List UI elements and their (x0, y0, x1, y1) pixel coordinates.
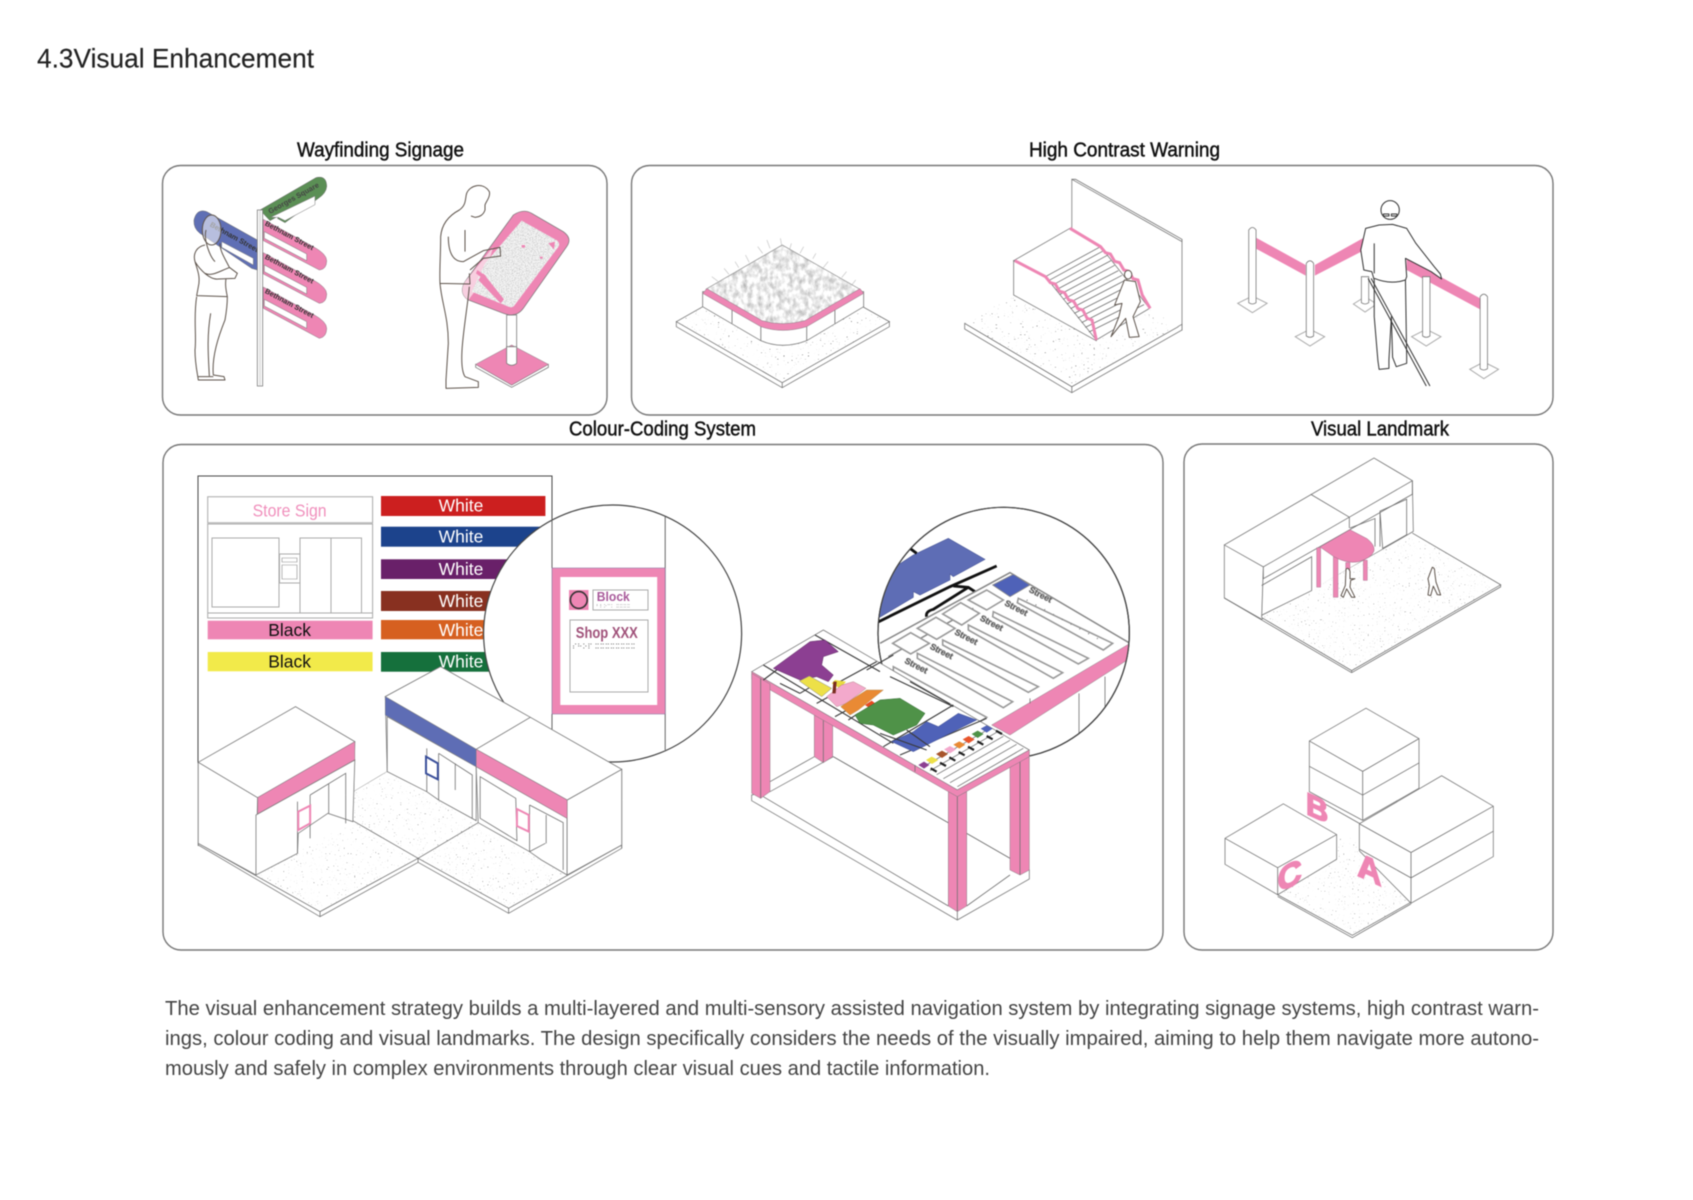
illustration: signpost and woman: Georges Square (267, 180, 320, 216)
letter C: C (1278, 852, 1302, 900)
colour bar: green: White (439, 652, 483, 672)
sign plate: ⠃⠇⠕⠉⠅ ⠭⠭⠭⠭ (596, 604, 630, 610)
sign plate: Shop XXX (576, 625, 638, 642)
illustration: man at map kiosk (440, 185, 569, 388)
illustration: signpost and woman: Bethnam Street (263, 252, 316, 286)
colour bar: yellow (208, 652, 373, 672)
colour bar: red (381, 496, 545, 516)
colour bar: blue (381, 526, 545, 547)
illustration: isometric shops (198, 667, 622, 917)
panel: visual landmark (1184, 444, 1553, 950)
colour bar: brown (381, 591, 545, 611)
colour bar: yellow: Black (268, 652, 311, 672)
magnifier: tactile map detail (875, 507, 1130, 759)
colour bar: red: White (439, 496, 483, 516)
magnifier: store sign detail (484, 505, 742, 762)
panel: colour-coding system (163, 444, 1163, 950)
panel: wayfinding signage (162, 166, 607, 415)
panel: high contrast warning (632, 166, 1553, 415)
sign plate (552, 568, 665, 714)
colour bar: blue: White (439, 526, 483, 546)
illustration: signpost and woman: Bethnam Street (263, 286, 316, 320)
illustration: canopy landmark (1224, 458, 1501, 673)
illustration: signpost and woman: Bethnam Street (263, 219, 316, 252)
illustration: stairs edge and walker (965, 179, 1182, 393)
title: 4.3Visual Enhancement (37, 44, 314, 74)
illustration: letter landmarks (1225, 708, 1493, 938)
magnifier: tactile map detail: Street (953, 627, 980, 647)
colour bar: pink: Black (268, 620, 311, 640)
magnifier: tactile map detail: Street (928, 641, 955, 661)
illustration: planter edge (676, 238, 889, 388)
colour bar: orange (381, 620, 545, 640)
letter A: A (1357, 846, 1381, 894)
heading: High Contrast Warning: High Contrast Warning (1029, 140, 1220, 162)
colour bar: purple: White (439, 559, 483, 579)
body text (165, 998, 1539, 1080)
illustration: tactile map table (752, 630, 1029, 920)
illustration: barrier and man with cane (1238, 201, 1499, 386)
colour bar: purple (381, 559, 545, 579)
magnifier: tactile map detail: Street (1027, 585, 1054, 605)
illustration frame (198, 476, 552, 763)
illustration: signpost and woman (194, 177, 327, 386)
colour bar: brown: White (439, 591, 483, 611)
magnifier: tactile map detail: Street (978, 613, 1005, 633)
letter B: B (1306, 786, 1328, 830)
colour bar: green (381, 652, 545, 672)
illustration: signpost and woman: Bethnam Street (208, 220, 261, 254)
body text: mously and safely in complex environments through clear visual cues and tactile information. (165, 1058, 990, 1080)
store elevation (208, 497, 373, 618)
magnifier: tactile map detail: Street (1003, 598, 1030, 618)
sign plate: Block (597, 589, 631, 604)
body text: ings, colour coding and visual landmarks. The design specifically considers the needs of the visually impaired, aiming to help them navigate more autono- (165, 1028, 1539, 1050)
heading: Visual Landmark: Visual Landmark (1311, 418, 1450, 440)
colour bar: orange: White (439, 620, 483, 640)
sign plate: ⠎⠓⠕⠏ ⠭⠭⠭⠭⠭⠭⠭⠭ (572, 643, 635, 651)
heading: Wayfinding Signage: Wayfinding Signage (297, 140, 464, 162)
heading: Colour-Coding System: Colour-Coding System (569, 418, 756, 440)
colour bar: pink (208, 620, 373, 640)
body text: The visual enhancement strategy builds a multi-layered and multi-sensory assisted navigation system by integrating signage systems, high contrast warn- (165, 998, 1539, 1020)
text: store sign: Store Sign (253, 500, 327, 520)
magnifier: tactile map detail: Street (903, 656, 930, 676)
circle edge over contents (878, 507, 1129, 759)
